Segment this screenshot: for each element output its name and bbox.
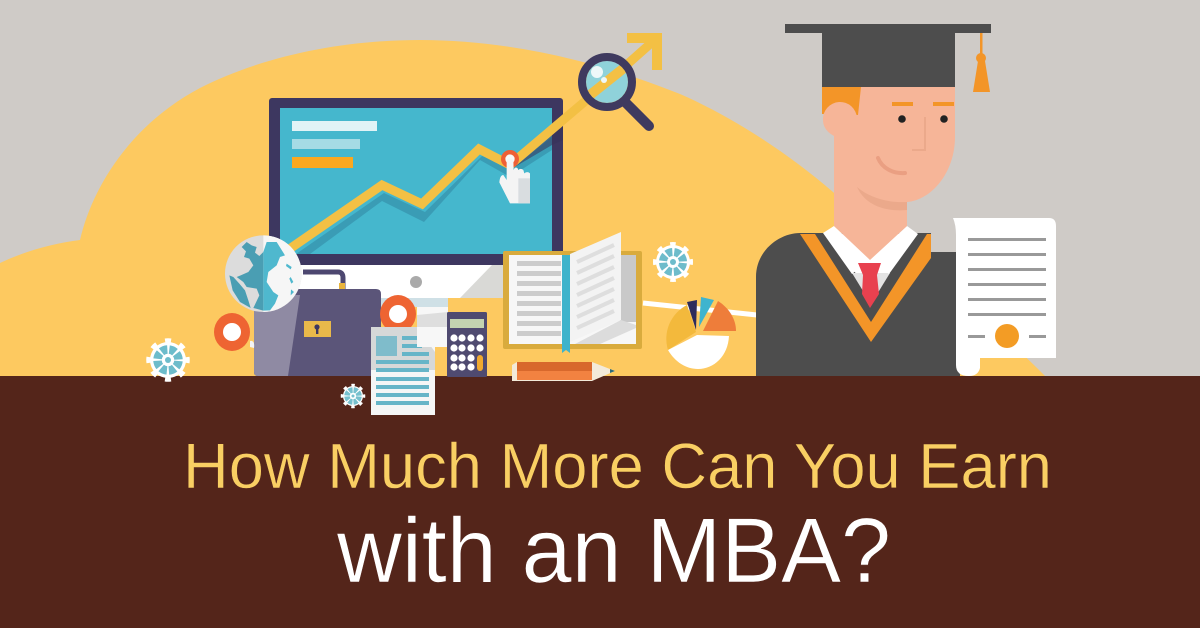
white connector line bbox=[643, 303, 757, 315]
icon: hand pointer bbox=[499, 150, 530, 203]
yellow cloud background bbox=[0, 40, 1045, 376]
heading line 2: with an MBA? bbox=[336, 500, 891, 602]
monitor bbox=[269, 98, 563, 307]
chin shadow bbox=[857, 187, 907, 210]
mortarboard cap bbox=[785, 24, 991, 87]
growth chart arrow bbox=[288, 33, 662, 254]
shirt and collar bbox=[823, 226, 918, 304]
tassel bbox=[973, 33, 990, 92]
screen text bars bbox=[292, 121, 377, 168]
gown orange trim bbox=[800, 234, 931, 342]
graduate figure bbox=[756, 24, 991, 376]
gown bbox=[756, 233, 960, 376]
icon: pencil bbox=[512, 362, 615, 381]
hair bbox=[822, 87, 861, 115]
icon: orange ring right bbox=[380, 295, 416, 333]
icon: magnifying glass bbox=[580, 57, 649, 126]
icon: gear small bbox=[342, 385, 364, 407]
brown footer panel bbox=[0, 376, 1200, 628]
icon: open book bbox=[503, 232, 642, 353]
icon: globe bbox=[225, 235, 302, 312]
icon: document page bbox=[371, 327, 435, 415]
nose bbox=[912, 117, 925, 150]
eyes bbox=[898, 115, 948, 123]
eyebrows bbox=[892, 102, 954, 106]
pie chart bbox=[666, 297, 736, 369]
tie bbox=[858, 263, 881, 308]
ear bbox=[823, 102, 857, 150]
icon: gear right bbox=[655, 244, 691, 280]
monitor stand plate bbox=[417, 307, 448, 347]
smile bbox=[878, 158, 905, 173]
diploma bbox=[953, 218, 1056, 376]
icon: orange ring left bbox=[214, 313, 254, 351]
icon: gear left bbox=[148, 340, 188, 380]
heading line 1: How Much More Can You Earn bbox=[183, 430, 1052, 502]
icon: briefcase bbox=[254, 272, 381, 376]
head and neck bbox=[834, 87, 955, 260]
icon: calculator bbox=[447, 312, 487, 377]
